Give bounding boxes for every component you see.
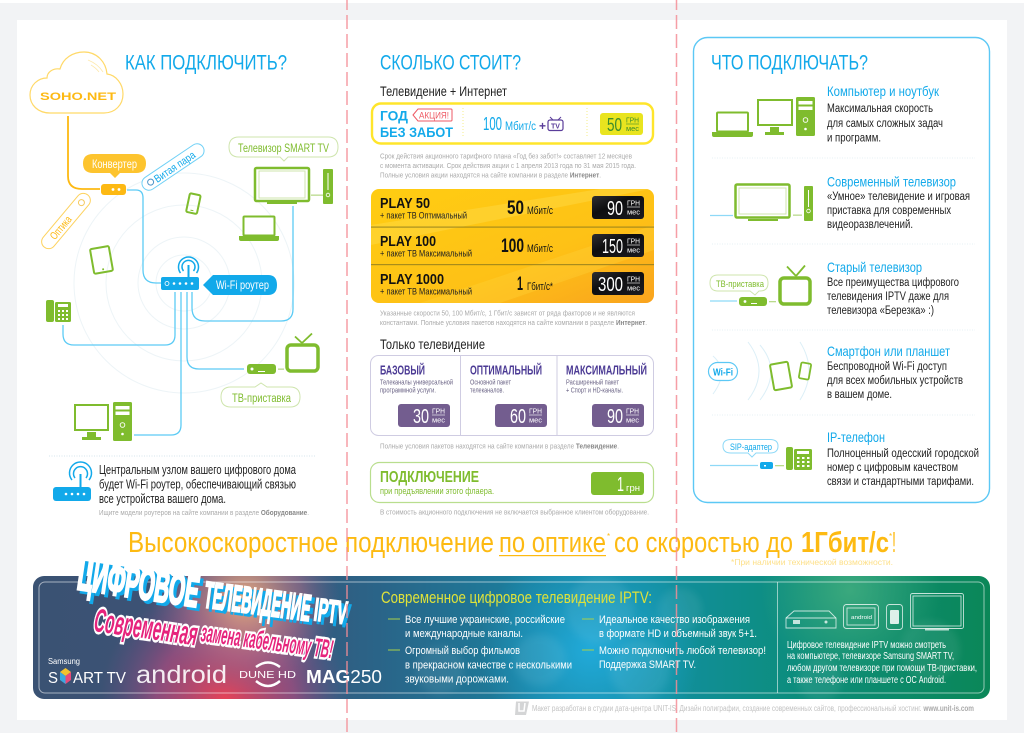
row: PLAY 1000: PLAY 1000 [380,271,444,288]
row: PLAY 100: PLAY 100 [380,233,436,250]
plan: year without worries: ГОД [380,108,408,124]
item: smartphone or tablet: в вашем доме. [827,389,892,401]
panel: PLAY plans [371,189,654,303]
banner list: left column: Все лучшие украинские, российские [405,614,565,626]
item: computer and laptop: Компьютер и ноутбук [827,83,940,99]
banner list: left column: звуковыми дорожками. [405,674,509,686]
banner list: right column: в формате HD и объемный звук 5+1. [599,628,757,640]
plan: optimal: телеканалов. [470,386,504,394]
plan: basic [380,362,453,428]
banner text: where to watch: Цифровое телевидение IPTV можно смотреть [787,640,946,651]
icon: wifi, tablet, phone: Wi-Fi [713,366,733,378]
headline: high speed connection: Высокоскоростное подключение [128,527,494,559]
wifi signal rings [74,173,294,393]
item: old TV [710,259,959,317]
panel: how much it costs [370,50,654,516]
plan: year without worries: БЕЗ ЗАБОТ [380,124,453,140]
logos: S [48,670,58,687]
plan: year without worries: 100 [483,114,502,134]
tag: optical fibre: Оптика [48,213,75,242]
icon: SIP adapter and phone [710,440,812,470]
plan: year without worries: TV [551,122,560,130]
icon: laptop, monitor, tower [712,97,815,137]
icon: modern TV [710,184,813,221]
plan: year without worries: + [539,119,546,133]
icon: desk phone [46,300,71,322]
banner text: where to watch: а также телефоне или планшете с ОС Android. [787,675,946,686]
icon: smart TV [255,168,333,204]
banner list: left column: Огромный выбор фильмов [405,645,520,657]
icon: SIP adapter and phone: SIP-адаптер [730,442,772,453]
note: promo terms: с момента активации. Срок действия акции с 1 апреля 2013 года по 31 мая 2015 года. [380,161,636,170]
row: PLAY 1000: ГРН [627,274,640,284]
headline: high speed connection: * [607,532,610,541]
item: IP phone [710,429,979,488]
row: PLAY 100: ГРН [627,236,640,246]
plan: optimal: мес [529,416,542,424]
callout: set-top box: ТВ-приставка [232,393,291,405]
note: promo terms: Срок действия акционного тарифного плана «Год без забот!» составляет 12 месяцев [380,152,632,160]
note: speed terms: Указанные скорости 50, 100 Мбит/с, 1 Гбит/с зависят от ряда факторов и не являются [380,308,635,318]
note: promo terms: Полные условия акции находятся на сайте компании в разделе Интернет. [380,170,601,180]
text: ! [892,527,896,559]
row: PLAY 100: Мбит/с [527,243,553,255]
headline: high speed connection: *При наличии технической возможности. [731,557,893,567]
icon: router small [53,462,92,501]
item: smartphone or tablet: Смартфон или планшет [827,343,950,359]
icon: wifi, tablet, phone [708,342,811,400]
tag: optical fibre [39,190,93,252]
banner list: right column: Идеальное качество изображения [599,614,750,626]
plan: basic: БАЗОВЫЙ [380,362,425,378]
banner list: left column: в прекрасном качестве с несколькими [405,660,572,672]
note: speed terms: константами. Полные условия пакетов находятся на сайте компании в разделе Интернет. [380,318,647,327]
headline: high speed connection: по оптике [499,527,606,559]
connection lines [63,116,293,435]
text: central node description: будет Wi-Fi роутер, обеспечивающий связью [99,478,296,492]
item: old TV: Старый телевизор [827,259,922,275]
item: computer and laptop: и программ. [827,132,881,144]
callout: converter: Конвертер [92,159,137,171]
plan: year without worries: Мбит/с [505,121,536,133]
panel: connection fee: при предъявлении этого флаера. [380,486,494,497]
panel: connection fee: ПОДКЛЮЧЕНИЕ [380,469,479,486]
icon: tablet [90,246,113,274]
banner subtitle: Современная [92,601,200,652]
plan: optimal: ОПТИМАЛЬНЫЙ [470,362,542,378]
item: IP phone: номер с цифровым качеством [827,462,958,474]
banner text: where to watch [787,640,977,686]
banner background [33,576,990,702]
banner list: right column: Можно подключить любой телевизор! [599,645,766,657]
logos [48,657,382,689]
row: PLAY 100: мес [627,246,640,254]
logos: MAG250 [306,666,382,687]
note: promo terms [380,152,636,180]
device outline icons: android [851,615,872,621]
note: connection terms: В стоимость акционного подключения не включается выбранное клиентом оборудование. [380,508,649,516]
plan: basic: Телеканалы универсальной [380,378,453,386]
item: modern TV: приставка для современных [827,205,951,217]
row: PLAY 50: Мбит/с [527,205,553,217]
footer credit [515,702,974,715]
panel: TV only plans [370,356,654,436]
text: central node description: Центральным узлом вашего цифрового дома [99,463,296,477]
icon: desktop computer [75,402,132,441]
icon: phone [186,193,201,214]
row: PLAY 1000 [380,271,644,298]
item: modern TV: видеоразвлечений. [827,219,913,231]
item: IP phone: связи и стандартными тарифами. [827,476,974,488]
banner heading: Современное цифровое телевидение IPTV: [381,588,652,607]
row: PLAY 50: + пакет ТВ Оптимальный [380,210,467,222]
item: computer and laptop: Максимальная скорость [827,103,933,115]
plan: year without worries: АКЦИЯ! [419,110,449,122]
headline: high speed connection: 1Гбит/с [801,527,889,559]
row: PLAY 1000: + пакет ТВ Максимальный [380,286,472,298]
panel: connection fee: 1 [617,474,624,496]
row: PLAY 1000: Гбит/с* [527,281,554,293]
callout: wifi router: Wi-Fi роутер [216,278,269,292]
tag: twisted pair: Витая пара [152,149,199,186]
logos: DUNE HD [239,669,296,681]
headline: high speed connection: со скоростью до [614,527,793,559]
row: PLAY 100 [380,233,644,260]
banner title: ТЕЛЕВИДЕНИЕ [202,574,313,629]
banner: digital TV IPTV [33,550,990,702]
plan: maximum: 90 [607,406,623,428]
item: modern TV: «Умное» телевидение и игровая [827,191,970,203]
row: PLAY 50: PLAY 50 [380,195,430,212]
text: central node description: Ищите модели роутеров на сайте компании в разделе Оборудование. [99,508,309,517]
plan: year without worries: мес [626,124,639,133]
row: PLAY 50 [380,195,644,222]
plan: basic: программной услуги. [380,386,436,394]
heading: how to connect: КАК ПОДКЛЮЧИТЬ? [125,50,287,74]
banner list: left column [388,614,572,686]
banner text: where to watch: на компьютере, телевизоре Samsung SMART TV, [787,651,954,662]
item: old TV: Все преимущества цифрового [827,277,959,289]
row: PLAY 1000: 300 [598,274,623,296]
logos: android [136,661,227,689]
panel: connection fee: грн [626,483,640,494]
banner list: left column: и международные каналы. [405,628,523,640]
item: IP phone: IP-телефон [827,429,885,445]
item: old TV: телевидения IPTV даже для [827,291,949,303]
banner title: ЦИФРОВОЕ [75,550,202,617]
row: PLAY 50: 90 [607,198,623,220]
panel: connection fee [370,462,654,502]
plan: maximum [566,362,647,428]
banner list: right column [582,614,766,671]
plan: optimal: ГРН [529,406,542,416]
device outline icons [786,594,964,630]
plan: basic: ГРН [432,406,445,416]
banner: digital TV IPTV: IPTV [312,591,350,631]
item: computer and laptop [712,83,943,144]
plan: maximum: мес [626,416,639,424]
note: TV terms: Полные условия пакетов находятся на сайте компании в разделе Телевидение. [380,442,619,450]
item: IP phone: Полноценный одесский городской [827,448,979,460]
plan: maximum: + Спорт и HD-каналы. [566,386,623,394]
plan: optimal: Основной пакет [470,378,511,386]
text: central node description [99,463,309,517]
icon: set-top box and old TV: ТВ-приставка [716,279,765,290]
row: PLAY 1000: 1 [517,274,523,295]
callout: converter [83,154,146,195]
icon: set-top box and old TV [247,334,318,374]
banner list: right column: Поддержка SMART TV. [599,659,696,671]
plan: basic: мес [432,416,445,424]
row: PLAY 100: + пакет ТВ Максимальный [380,248,472,260]
plan: maximum: ГРН [626,406,639,416]
logos: ART TV [73,670,126,687]
item: smartphone or tablet: Беспроводной Wi-Fi доступ [827,361,947,373]
row: PLAY 1000: мес [627,284,640,292]
item: smartphone or tablet: для всех мобильных устройств [827,375,963,387]
callout: set-top box [221,383,300,407]
row: PLAY 50: 50 [507,198,524,219]
plan: year without worries: ГРН [626,116,639,124]
item: smartphone or tablet [708,342,963,401]
heading: how much: СКОЛЬКО СТОИТ? [380,50,521,74]
item: modern TV: Современный телевизор [827,174,956,190]
plan: maximum: МАКСИМАЛЬНЫЙ [566,362,647,378]
footer credit: Макет разработан в студии дата-центра UNIT-IS. Дизайн полиграфии, создание современных сайтов, профессиональный хостинг. www.unit-is.com [532,704,974,713]
note: speed terms [380,308,647,327]
icon: cloud SOHO.NET [30,52,123,113]
text: central node description: все устройства вашего дома. [99,492,226,506]
heading: what to connect: ЧТО ПОДКЛЮЧАТЬ? [711,50,868,74]
icon: set-top box and old TV [710,266,810,306]
icon: laptop [239,216,279,241]
plan: optimal [470,362,547,428]
callout: smart TV [229,137,338,161]
item: modern TV [710,174,970,231]
headline: high speed connection: * [889,532,892,541]
callout: smart TV: Телевизор SMART TV [238,143,329,155]
row: PLAY 100: 150 [602,236,623,258]
logos: Samsung [48,657,80,666]
plan: optimal: 60 [510,406,526,428]
row: PLAY 50: мес [627,208,640,216]
callout: wifi router [203,275,277,295]
panel: what to connect [694,38,990,502]
tag: twisted pair [139,141,207,193]
banner: digital TV IPTV: замена кабельному ТВ! [199,617,335,664]
row: PLAY 50: ГРН [627,198,640,208]
item: computer and laptop: для самых сложных задач [827,118,943,130]
plan: year without worries [372,104,653,144]
headline: high speed connection [128,527,896,567]
subheading: TV + Internet: Телевидение + Интернет [380,83,507,99]
item: old TV: телевизора «Березка» :) [827,305,934,317]
plan: year without worries: 50 [607,115,622,135]
plan: maximum: Расширенный пакет [566,378,619,386]
row: PLAY 100: 100 [501,236,524,257]
panel: how to connect [30,50,338,517]
icon: cloud SOHO.NET: SOHO.NET [40,91,116,103]
icon: wifi router [161,257,199,290]
subheading: TV only: Только телевидение [380,336,485,352]
plan: basic: 30 [413,406,429,428]
